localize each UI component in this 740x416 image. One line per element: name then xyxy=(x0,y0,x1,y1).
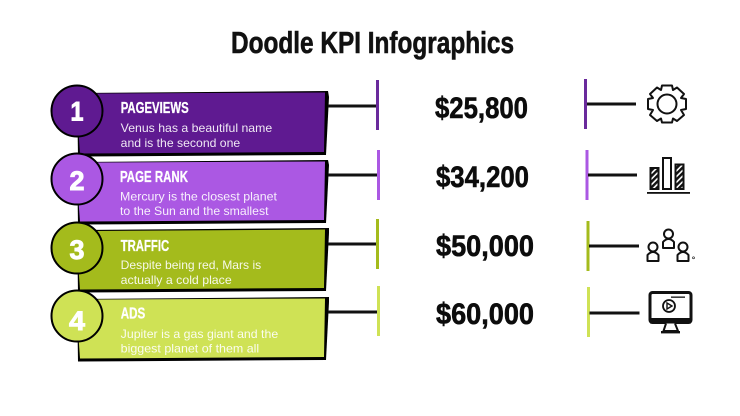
description: Jupiter is a gas giant and the xyxy=(121,327,279,341)
number badge: 3 xyxy=(70,235,84,265)
heading: TRAFFIC xyxy=(121,238,169,255)
value: page rank: $34,200 xyxy=(436,161,529,194)
heading: ADS xyxy=(121,306,145,322)
description xyxy=(121,327,279,356)
banner shape xyxy=(77,297,329,362)
panel: pageviews xyxy=(52,86,329,156)
description: Mercury is the closest planet xyxy=(120,190,278,204)
heading: PAGE RANK xyxy=(120,169,189,186)
number badge xyxy=(52,86,102,136)
number badge: 4 xyxy=(69,306,85,336)
number badge: 1 xyxy=(70,96,84,126)
number badge xyxy=(52,290,102,342)
banner shape xyxy=(77,91,329,156)
description: actually a cold place xyxy=(121,273,232,287)
connector: ads to icon xyxy=(587,287,640,337)
title: Doodle KPI Infographics xyxy=(231,25,514,60)
connector: pageviews to value xyxy=(328,80,379,130)
connector: page rank to icon xyxy=(586,150,637,200)
description: Venus has a beautiful name xyxy=(121,121,273,135)
number badge xyxy=(52,222,102,274)
description xyxy=(120,190,278,218)
icon: bar chart xyxy=(647,158,690,194)
connector: page rank to value xyxy=(328,150,380,200)
number badge: 2 xyxy=(70,166,84,196)
description: and is the second one xyxy=(121,136,241,150)
icon: gear xyxy=(648,86,686,122)
connector: ads to value xyxy=(328,286,380,336)
icon: monitor with play button xyxy=(650,292,691,333)
panel: page rank xyxy=(52,154,329,224)
panel: traffic xyxy=(52,222,329,292)
description xyxy=(121,121,273,150)
banner shape xyxy=(77,228,329,292)
banner shape xyxy=(77,160,329,224)
value: pageviews: $25,800 xyxy=(435,92,528,125)
value: ads: $60,000 xyxy=(436,298,534,331)
description xyxy=(121,258,261,287)
description: to the Sun and the smallest xyxy=(120,204,269,218)
icon: people xyxy=(648,230,694,261)
description: Despite being red, Mars is xyxy=(121,258,261,272)
connector: pageviews to icon xyxy=(584,79,636,129)
number badge xyxy=(52,154,102,204)
connector: traffic to value xyxy=(328,219,379,269)
description: biggest planet of them all xyxy=(121,342,259,356)
value: traffic: $50,000 xyxy=(436,230,534,263)
panel: ads xyxy=(52,290,329,362)
connector: traffic to icon xyxy=(586,221,639,271)
heading: PAGEVIEWS xyxy=(121,100,189,117)
